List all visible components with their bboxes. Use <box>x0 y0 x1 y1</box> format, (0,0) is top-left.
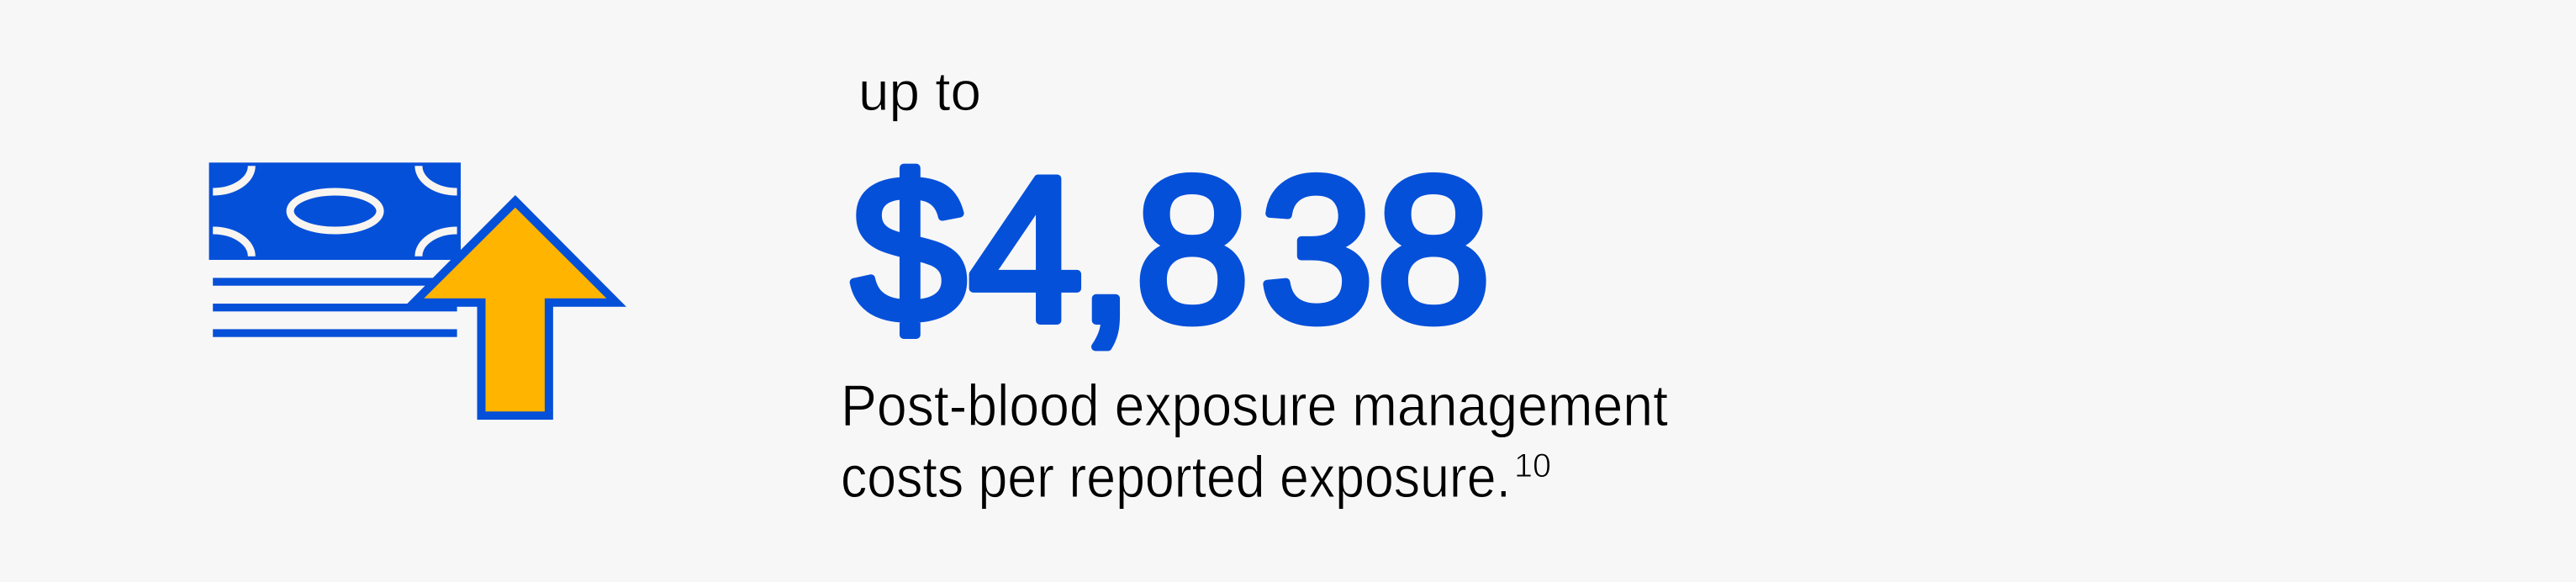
icon: banknotes with rising arrow <box>209 162 626 420</box>
text: up to: up to <box>858 61 981 122</box>
text: description: 10 <box>1514 447 1551 484</box>
icon: stacked note lines <box>213 278 457 337</box>
headline figure: $4,838: $4,838 <box>852 134 1491 364</box>
icon: yellow up arrow <box>404 195 626 420</box>
text: description: costs per reported exposure. <box>841 444 1511 510</box>
text: description <box>841 373 1668 510</box>
icon: banknote <box>209 162 461 260</box>
text: description: Post-blood exposure management <box>841 373 1668 438</box>
